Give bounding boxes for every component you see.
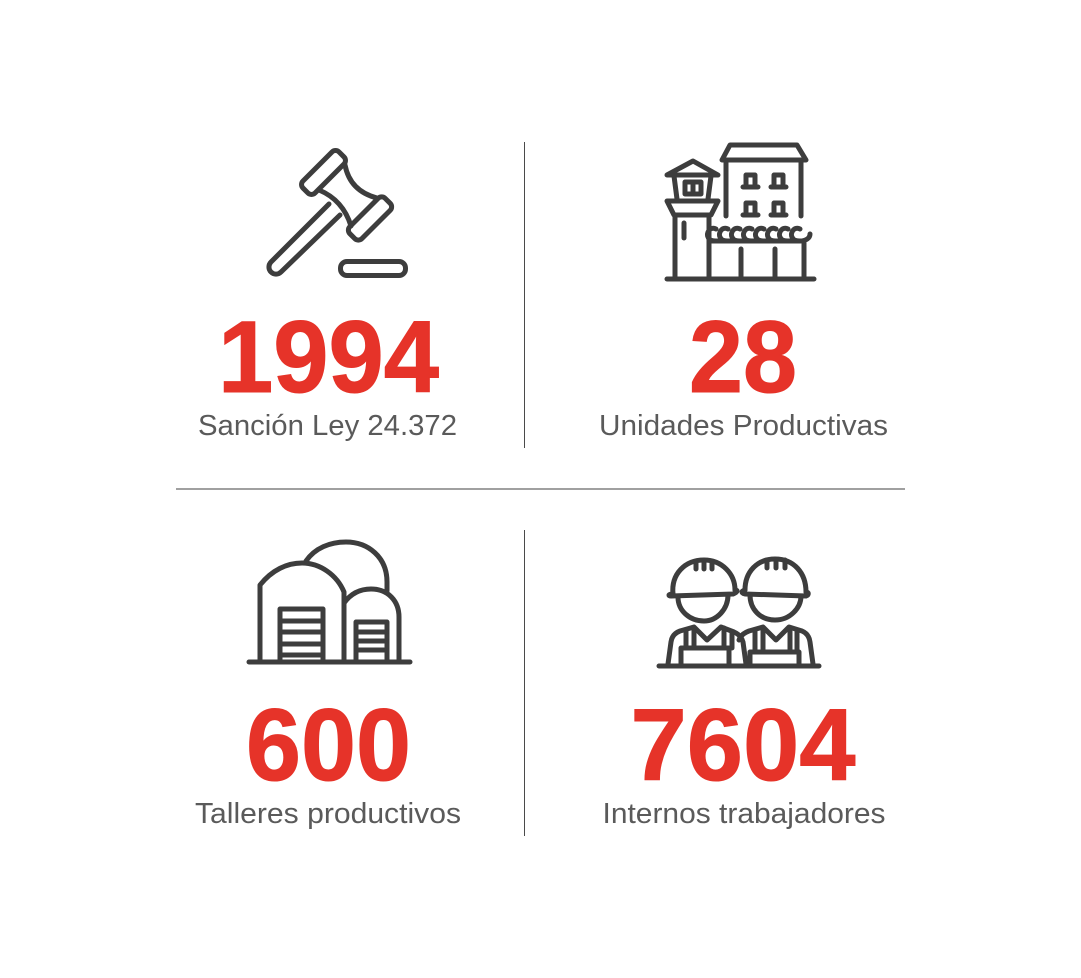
divider vertical top (524, 142, 525, 448)
icon: gavel (269, 148, 406, 276)
panel: working inmates (602, 559, 886, 830)
number: 7604: 7604 (630, 688, 856, 802)
icon: warehouses (249, 542, 410, 662)
number: 28: 28 (689, 300, 797, 414)
label: Internos trabajadores: Internos trabajadores (602, 798, 886, 830)
label: Sanción Ley 24.372: Sanción Ley 24.372 (198, 410, 457, 442)
icon: two workers with helmets (659, 559, 819, 666)
label: Unidades Productivas: Unidades Productivas (599, 410, 888, 442)
panel: law sanction (198, 148, 457, 442)
divider horizontal (176, 488, 905, 490)
divider vertical bottom (524, 530, 525, 836)
number: 600: 600 (246, 688, 411, 802)
panel: productive units (599, 145, 888, 442)
label: Talleres productivos: Talleres productivos (195, 798, 461, 830)
number: 1994: 1994 (218, 300, 439, 414)
panel: workshops (195, 542, 461, 830)
icon: prison building with watchtower (667, 145, 814, 279)
